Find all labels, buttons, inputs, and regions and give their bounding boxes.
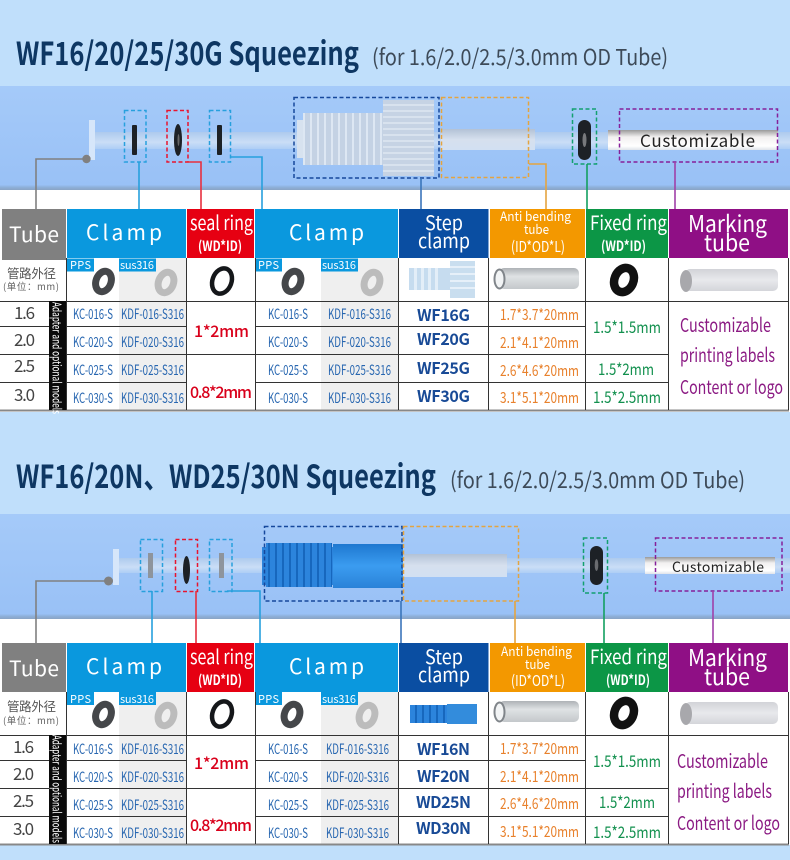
seal ring sizes	[190, 318, 252, 403]
anti bending tube sizes: 2.1*4.1*20mm	[500, 766, 579, 787]
table header: (WD*ID)	[601, 236, 646, 256]
PPS / sus316 tags and washers	[67, 257, 383, 295]
seal ring sizes: 0.8*2mm	[190, 379, 252, 403]
PPS / sus316 tags and washers: sus316	[322, 691, 356, 707]
clamp part numbers: KC-016-S	[268, 304, 308, 324]
clamp part numbers: KDF-020-S316	[121, 332, 184, 352]
anti bending tube sizes: 1.7*3.7*20mm	[500, 738, 579, 759]
callout: step clamp	[264, 526, 402, 643]
tube diameters: 1.6	[13, 733, 34, 758]
step clamp models: WF16N	[417, 736, 470, 760]
step clamp models	[417, 302, 470, 407]
callout: fixed ring	[572, 109, 596, 209]
anti bending tube sizes: 2.6*4.6*20mm	[500, 360, 579, 381]
table header: Anti bending	[501, 641, 573, 660]
callout: marking tube	[656, 538, 782, 643]
assembly diagram band	[0, 86, 790, 412]
clamp part numbers: KC-020-S	[268, 767, 308, 787]
step clamp models: WF20N	[417, 763, 470, 787]
title: WF16/20/25/30G Squeezing	[16, 29, 359, 75]
anti bending tube sizes: 2.6*4.6*20mm	[500, 793, 579, 814]
fixed ring sizes: 1.5*2mm	[599, 789, 655, 813]
table header: Step	[425, 641, 463, 670]
PPS / sus316 tags and washers: sus316	[322, 257, 356, 273]
table header: clamp	[418, 659, 470, 688]
step clamp models: WF16G	[417, 302, 470, 326]
callout: tube	[36, 155, 91, 209]
fixed ring sizes: 1.5*2mm	[598, 356, 654, 380]
tube diameters: 1.6	[14, 299, 35, 324]
clamp part numbers: KDF-016-S316	[328, 304, 391, 324]
icon: fixed ring	[611, 265, 637, 295]
clamp part numbers: KDF-016-S316	[121, 304, 184, 324]
assembly diagram band	[0, 514, 790, 845]
header row: tube label	[3, 263, 59, 293]
clamp part numbers: KDF-025-S316	[121, 360, 184, 380]
side note	[48, 301, 66, 414]
clamp part numbers: KC-025-S	[73, 360, 113, 380]
clamp part numbers: KDF-025-S316	[121, 795, 184, 815]
tube diameters	[14, 299, 35, 406]
tube diameters: 2.0	[14, 326, 35, 351]
icon: step clamp	[409, 261, 475, 298]
seal ring sizes: 1*2mm	[194, 750, 249, 774]
specification table	[0, 691, 789, 844]
seal ring sizes	[190, 750, 252, 836]
table header: Clamp	[86, 217, 162, 247]
callout: step clamp	[294, 98, 439, 209]
table header: Clamp	[289, 651, 364, 681]
anti bending tube sizes: 2.1*4.1*20mm	[500, 332, 579, 353]
clamp part numbers: KDF-025-S316	[328, 360, 391, 380]
table header: Tube	[9, 219, 59, 249]
PPS / sus316 tags and washers: PPS	[70, 691, 91, 707]
callout: seal ring	[176, 540, 198, 643]
callout: marking tube: Customizable	[672, 557, 764, 577]
table header: (WD*ID)	[198, 670, 242, 690]
callout: fixed ring	[584, 538, 608, 643]
icon: fixed ring	[611, 698, 637, 728]
table header: Anti bending	[500, 206, 572, 225]
clamp part numbers: KC-020-S	[73, 767, 113, 787]
clamp part numbers: KC-020-S	[268, 332, 308, 352]
header row: tube label	[3, 696, 59, 727]
table header: Marking	[688, 205, 767, 239]
callout: marking tube: Customizable	[640, 127, 755, 152]
table header: seal ring	[190, 207, 253, 236]
step clamp models: WD25N	[416, 789, 471, 813]
icon: anti bending tube	[494, 701, 579, 722]
clamp part numbers: KC-030-S	[268, 388, 308, 408]
clamp part numbers: KDF-025-S316	[326, 795, 389, 815]
tube diameters: 3.0	[13, 815, 34, 840]
table header: Step	[425, 207, 463, 236]
clamp part numbers: KDF-020-S316	[326, 767, 389, 787]
seal ring sizes: 1*2mm	[194, 318, 249, 342]
anti bending tube sizes: 3.1*5.1*20mm	[500, 387, 579, 408]
callout: anti bending tube	[442, 98, 546, 209]
anti bending tube sizes: 1.7*3.7*20mm	[500, 304, 579, 325]
step clamp models: WF20G	[417, 326, 470, 350]
clamp part numbers: KDF-030-S316	[326, 823, 389, 843]
table header: Clamp	[86, 651, 162, 681]
section 2: WF16/20N, WD25/30N	[0, 452, 790, 845]
table header: Fixed ring	[590, 641, 667, 670]
callout: clamp 2	[210, 540, 260, 643]
PPS / sus316 tags and washers: PPS	[258, 691, 279, 707]
clamp part numbers: KC-030-S	[268, 823, 308, 843]
clamp part numbers: KDF-030-S316	[121, 388, 184, 408]
step clamp models: WF25G	[417, 355, 470, 379]
table header: clamp	[418, 225, 470, 254]
table header: (WD*ID)	[606, 670, 650, 690]
fixed ring sizes	[593, 314, 661, 408]
clamp part numbers: KDF-020-S316	[121, 767, 184, 787]
clamp part numbers	[73, 739, 389, 843]
callout: marking tube	[620, 109, 778, 209]
anti bending tube sizes: 3.1*5.1*20mm	[500, 821, 579, 842]
specification table	[0, 257, 789, 414]
step clamp models: WD30N	[416, 815, 471, 839]
clamp part numbers: KC-030-S	[73, 823, 113, 843]
callout: clamp 1	[140, 540, 162, 643]
section 1: WF16/20/25/30G	[0, 29, 790, 414]
clamp part numbers: KC-025-S	[268, 360, 308, 380]
table header: tube	[704, 224, 750, 258]
icon: anti bending tube	[494, 268, 579, 289]
table header: Clamp	[289, 217, 364, 247]
callout: clamp 2	[210, 110, 262, 209]
tube diameters: 3.0	[14, 381, 35, 406]
header row: tube label: (单位：mm)	[3, 279, 59, 293]
PPS / sus316 tags and washers	[67, 691, 378, 728]
callout: seal ring	[167, 110, 201, 209]
icon: seal ring	[209, 699, 235, 729]
icon: marking tube	[680, 269, 778, 292]
fixed ring sizes: 1.5*1.5mm	[593, 314, 661, 338]
clamp part numbers: KDF-020-S316	[328, 332, 391, 352]
seal ring sizes: 0.8*2mm	[190, 812, 252, 836]
clamp part numbers: KDF-016-S316	[326, 739, 389, 759]
icon: marking tube	[680, 702, 778, 725]
title: WF16/20N、WD25/30N Squeezing	[16, 452, 436, 498]
table header: Fixed ring	[590, 207, 667, 236]
table header: seal ring	[190, 641, 253, 670]
side note: Adapter and optional models	[48, 302, 66, 414]
fixed ring sizes: 1.5*1.5mm	[593, 748, 661, 772]
clamp part numbers: KC-016-S	[73, 739, 113, 759]
title	[16, 29, 668, 75]
anti bending tube sizes	[500, 304, 579, 408]
anti bending tube sizes	[500, 738, 579, 842]
title: (for 1.6/2.0/2.5/3.0mm OD Tube)	[372, 40, 668, 72]
clamp part numbers: KC-025-S	[73, 795, 113, 815]
PPS / sus316 tags and washers: sus316	[120, 691, 154, 707]
PPS / sus316 tags and washers: PPS	[70, 257, 91, 273]
fixed ring sizes: 1.5*2.5mm	[593, 384, 661, 408]
tube diameters	[13, 733, 34, 840]
clamp part numbers: KC-016-S	[73, 304, 113, 324]
table header	[2, 639, 788, 692]
tube diameters: 2.0	[13, 760, 34, 785]
clamp part numbers: KC-025-S	[268, 795, 308, 815]
callout: anti bending tube	[404, 526, 518, 643]
title: (for 1.6/2.0/2.5/3.0mm OD Tube)	[450, 463, 745, 495]
clamp part numbers: KDF-030-S316	[328, 388, 391, 408]
table header: Tube	[9, 653, 59, 683]
fixed ring sizes	[593, 748, 661, 843]
table header: tube	[704, 658, 750, 692]
clamp part numbers	[73, 304, 391, 408]
icon: seal ring	[209, 266, 235, 296]
step clamp models: WF30G	[417, 383, 470, 407]
callout: clamp 1	[124, 110, 146, 209]
header row: tube label: (单位：mm)	[3, 713, 59, 727]
table header: tube	[525, 654, 550, 673]
clamp part numbers: KDF-030-S316	[121, 823, 184, 843]
icon: step clamp	[410, 704, 477, 724]
marking tube note	[680, 311, 783, 400]
PPS / sus316 tags and washers: sus316	[120, 257, 154, 273]
header row: tube label: 管路外径	[7, 263, 56, 282]
table header: (ID*OD*L)	[511, 670, 565, 691]
table header	[2, 205, 788, 258]
table header: (ID*OD*L)	[511, 236, 565, 257]
table header: tube	[524, 219, 549, 238]
table header: (WD*ID)	[198, 236, 242, 256]
clamp part numbers: KDF-016-S316	[121, 739, 184, 759]
marking tube note	[677, 747, 780, 836]
fixed ring sizes: 1.5*2.5mm	[593, 819, 661, 843]
callout: tube	[36, 576, 113, 643]
PPS / sus316 tags and washers: PPS	[258, 257, 279, 273]
clamp part numbers: KC-030-S	[73, 388, 113, 408]
table header: Marking	[688, 639, 767, 673]
clamp part numbers: KC-020-S	[73, 332, 113, 352]
clamp part numbers: KC-016-S	[268, 739, 308, 759]
step clamp models	[416, 736, 471, 839]
tube diameters: 2.5	[13, 787, 34, 812]
header row: tube label: 管路外径	[7, 696, 56, 715]
tube diameters: 2.5	[14, 352, 35, 377]
